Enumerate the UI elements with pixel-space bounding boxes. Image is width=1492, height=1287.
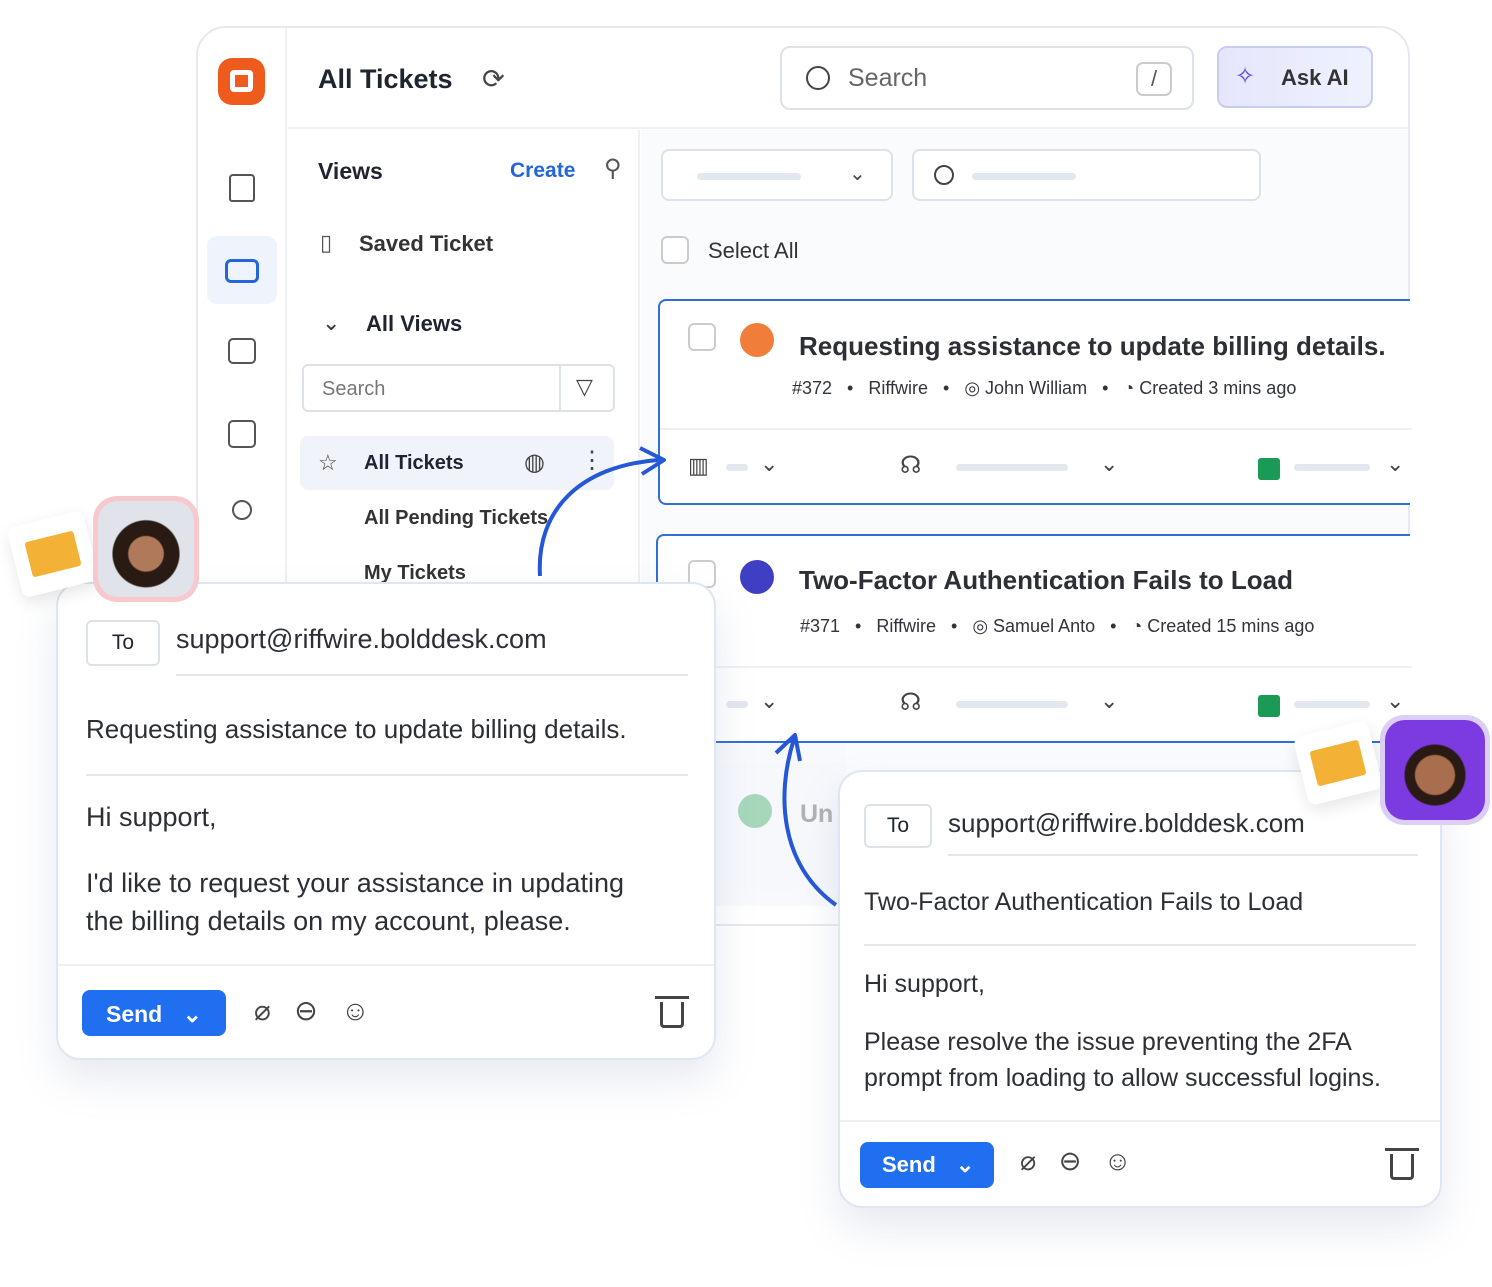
header	[288, 28, 1408, 129]
right pane	[641, 130, 1408, 906]
views panel: My Tickets	[364, 562, 466, 584]
email card right: Please resolve the issue preventing the 2FA prompt from loading to allow successful logins.	[864, 1028, 1381, 1092]
icon: tickets active	[207, 236, 277, 304]
faded ticket 3	[716, 744, 846, 906]
email card right: Two-Factor Authentication Fails to Load	[864, 888, 1303, 916]
arrow 2	[774, 732, 838, 907]
email card left: Send ⌄	[106, 1001, 202, 1027]
ticket card 1: ☊	[900, 452, 921, 479]
views panel: Views	[318, 158, 383, 184]
email card right: To	[887, 814, 909, 837]
ticket card 1: ⌄	[1100, 451, 1118, 476]
search box: Search	[848, 64, 927, 92]
ask ai button: Ask AI	[1281, 65, 1349, 90]
faded ticket 3: Un	[800, 800, 833, 828]
ticket card 1: #372 • Riffwire • ◎ John William • ◔ Created 3 mins ago	[792, 378, 1296, 398]
ask ai button	[1217, 46, 1373, 108]
icon: trash	[660, 1002, 684, 1028]
views panel: Search	[322, 378, 385, 400]
views panel	[288, 130, 640, 590]
icon: user	[232, 500, 252, 520]
email card left: Requesting assistance to update billing details.	[86, 714, 627, 744]
views panel: ◍	[524, 449, 545, 476]
ticket card 1: ⌄	[760, 451, 778, 476]
views panel: All Tickets	[364, 452, 464, 474]
email card left: To	[112, 631, 134, 654]
ticket card 1: ▥	[688, 453, 709, 478]
email card right	[838, 770, 1442, 1208]
views panel: Create	[510, 159, 575, 182]
heading: All Tickets ⟳	[318, 64, 505, 94]
email card left: I'd like to request your assistance in updating the billing details on my account, please.	[86, 868, 624, 936]
views panel: ▯	[320, 230, 332, 255]
views panel: ⋮	[580, 447, 604, 474]
email card right: Send ⌄	[882, 1152, 974, 1177]
views panel: ⌄	[322, 310, 340, 335]
email card left: Hi support,	[86, 802, 217, 832]
ticket card 1: ⌄	[1386, 451, 1404, 476]
email card right: Hi support,	[864, 970, 985, 998]
icon: calendar	[228, 420, 256, 448]
ticket card 2: #371 • Riffwire • ◎ Samuel Anto • ◔ Created 15 mins ago	[800, 616, 1314, 636]
views panel: All Views	[366, 311, 462, 336]
views panel: ☆	[318, 450, 338, 475]
app window	[196, 26, 1410, 926]
ticket card 1	[658, 299, 1410, 505]
envelope left	[6, 510, 100, 598]
views panel: ▽	[576, 374, 593, 399]
ticket card 2: ⌄	[760, 688, 778, 713]
arrow 1	[538, 446, 666, 576]
search box: /	[1151, 66, 1157, 91]
ticket card 2: ⌄	[1100, 688, 1118, 713]
ask ai button: ✧	[1235, 63, 1255, 90]
icon: chat	[228, 338, 256, 364]
ticket card 2	[656, 534, 1410, 743]
ticket card 1: Requesting assistance to update billing details.	[799, 331, 1386, 361]
logo	[218, 58, 265, 105]
views panel: Saved Ticket	[359, 231, 493, 256]
avatar left	[93, 496, 199, 602]
search box	[780, 46, 1194, 110]
sidebar	[198, 28, 287, 588]
email card left: ⌀ ⊖ ☺	[254, 995, 370, 1026]
ticket card 2: Two-Factor Authentication Fails to Load	[799, 565, 1293, 595]
icon: home	[229, 174, 255, 202]
envelope right	[1293, 720, 1383, 806]
email card left: support@riffwire.bolddesk.com	[176, 624, 547, 654]
email card left	[56, 582, 716, 1060]
right pane: ⌄	[849, 163, 866, 185]
ticket card 2: ⌄	[1386, 688, 1404, 713]
views panel: ⚲	[604, 155, 622, 182]
ticket card 2: ☊	[900, 689, 921, 716]
email card right: ⌀ ⊖ ☺	[1020, 1146, 1131, 1176]
email card right: support@riffwire.bolddesk.com	[948, 808, 1305, 838]
right pane: Select All	[708, 238, 798, 263]
views panel: All Pending Tickets	[364, 507, 548, 529]
avatar right	[1380, 715, 1490, 825]
icon: trash	[1390, 1154, 1414, 1180]
